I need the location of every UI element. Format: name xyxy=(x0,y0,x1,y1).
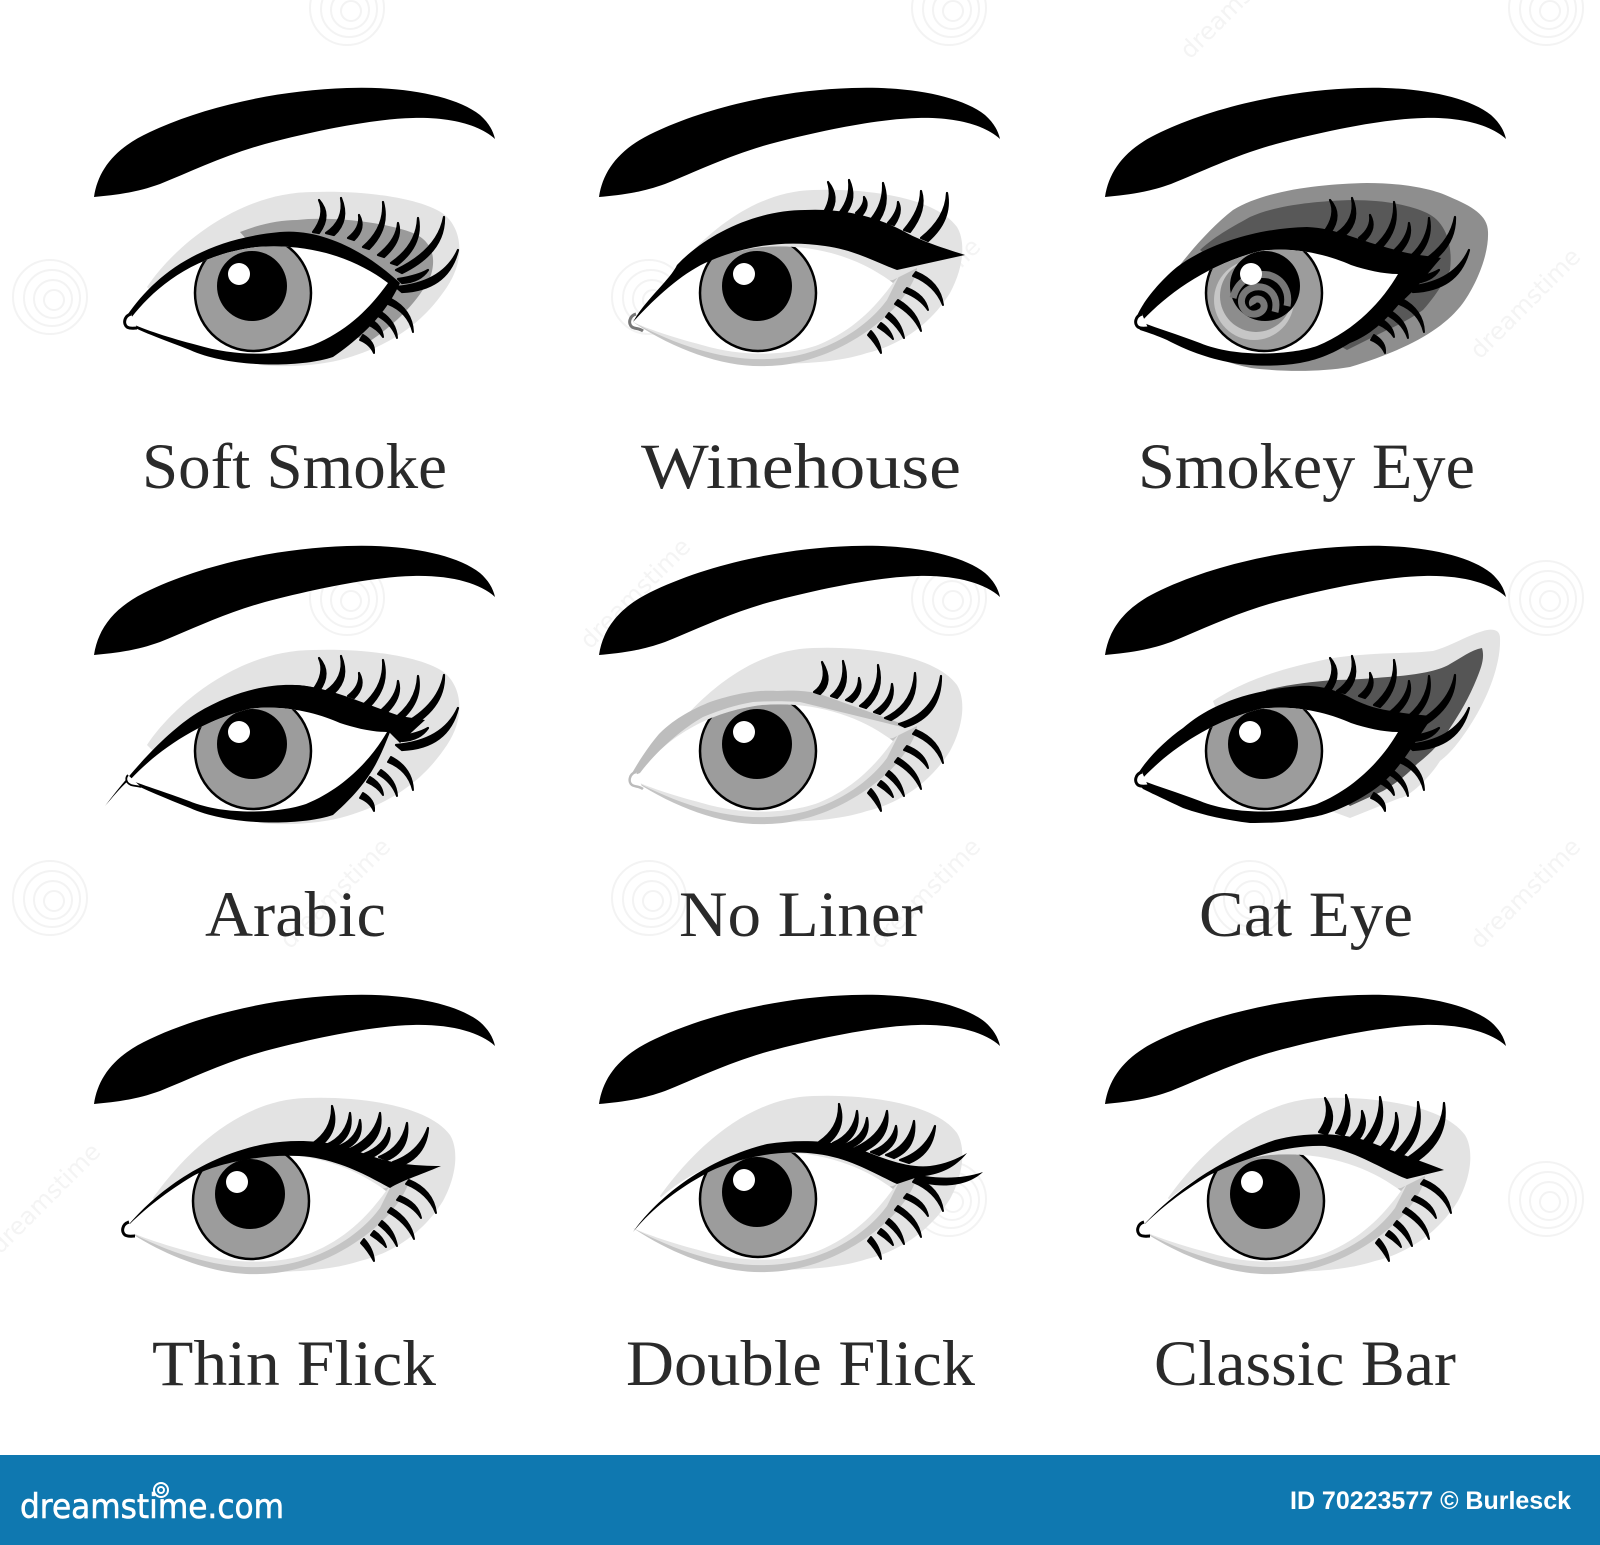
label: Arabic xyxy=(205,879,386,951)
eyebrow xyxy=(94,88,495,197)
panel: Arabic xyxy=(94,546,495,951)
eye: smokey xyxy=(1135,183,1488,371)
eyebrow xyxy=(599,88,1000,197)
eye: winehouse xyxy=(630,180,965,366)
eyebrow xyxy=(599,546,1000,655)
label: Soft Smoke xyxy=(142,431,447,503)
panel: Double Flick xyxy=(599,995,1000,1400)
eye: soft smoke xyxy=(124,192,459,366)
label: Classic Bar xyxy=(1154,1328,1456,1400)
watermark spirals and text: dreamstime xyxy=(574,533,696,654)
panel: No Liner xyxy=(599,546,1000,951)
eye: thin flick xyxy=(123,1098,455,1274)
panel: Soft Smoke xyxy=(94,88,495,503)
footer bar xyxy=(0,1455,1600,1545)
watermark spirals and text: dreamstime xyxy=(864,833,986,954)
panel: Smokey Eye xyxy=(1105,88,1506,503)
panel: Classic Bar xyxy=(1105,995,1506,1400)
eyebrow xyxy=(599,995,1000,1104)
label: Winehouse xyxy=(641,431,961,503)
eyebrow xyxy=(94,546,495,655)
eye: double flick xyxy=(633,1096,983,1272)
watermark spirals and text: dreamstime xyxy=(864,233,986,354)
logo text: dreamstime.com xyxy=(20,1487,284,1527)
eyebrow xyxy=(1105,546,1506,655)
logo spiral xyxy=(154,1483,168,1497)
image id credit: ID 70223577 © Burlesck xyxy=(1290,1487,1571,1515)
eye: no liner xyxy=(630,648,962,824)
panel: Cat Eye xyxy=(1105,546,1506,951)
eye: classic bar xyxy=(1138,1095,1470,1274)
eyebrow xyxy=(94,995,495,1104)
label: No Liner xyxy=(679,879,923,951)
eye: arabic xyxy=(105,650,459,824)
watermark spirals and text: dreamstime xyxy=(274,833,396,954)
eyebrow xyxy=(1105,88,1506,197)
panel: Thin Flick xyxy=(94,995,495,1400)
watermark spirals and text: dreamstime xyxy=(1464,833,1586,954)
watermark spirals and text: dreamstime xyxy=(1464,243,1586,364)
eyebrow xyxy=(1105,995,1506,1104)
label: Smokey Eye xyxy=(1138,431,1475,503)
label: Thin Flick xyxy=(152,1328,437,1400)
label: Double Flick xyxy=(626,1328,976,1400)
label: Cat Eye xyxy=(1199,879,1413,951)
panel: Winehouse xyxy=(599,88,1000,503)
eye: cat eye xyxy=(1135,630,1500,823)
